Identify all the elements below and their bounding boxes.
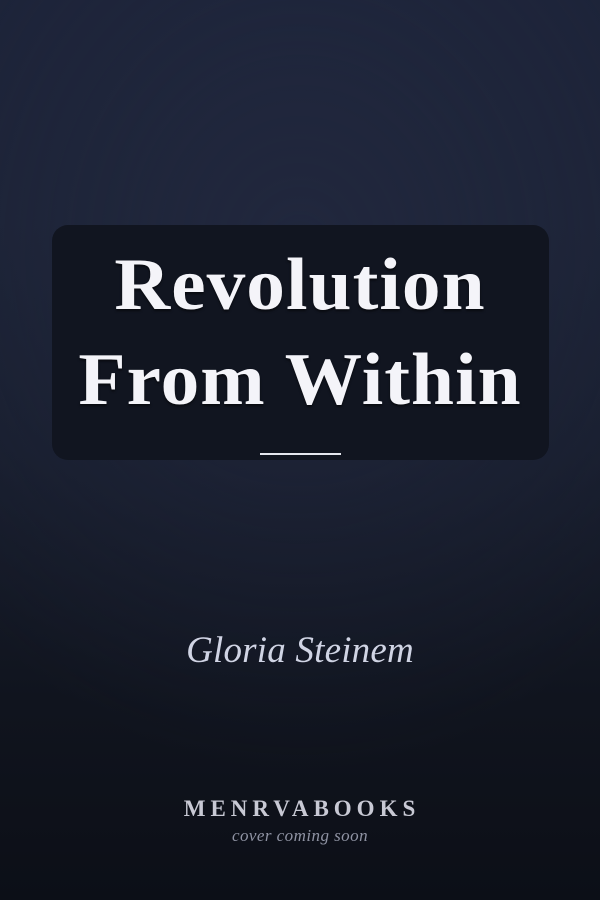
- author: Gloria Steinem: [186, 630, 414, 671]
- title divider: [260, 453, 341, 455]
- title: Revolution: [114, 244, 486, 326]
- tagline: cover coming soon: [232, 826, 368, 845]
- publisher: MENRVABOOKS: [184, 796, 420, 821]
- title: [78, 244, 522, 421]
- title: From Within: [78, 339, 522, 421]
- title panel: [52, 225, 549, 460]
